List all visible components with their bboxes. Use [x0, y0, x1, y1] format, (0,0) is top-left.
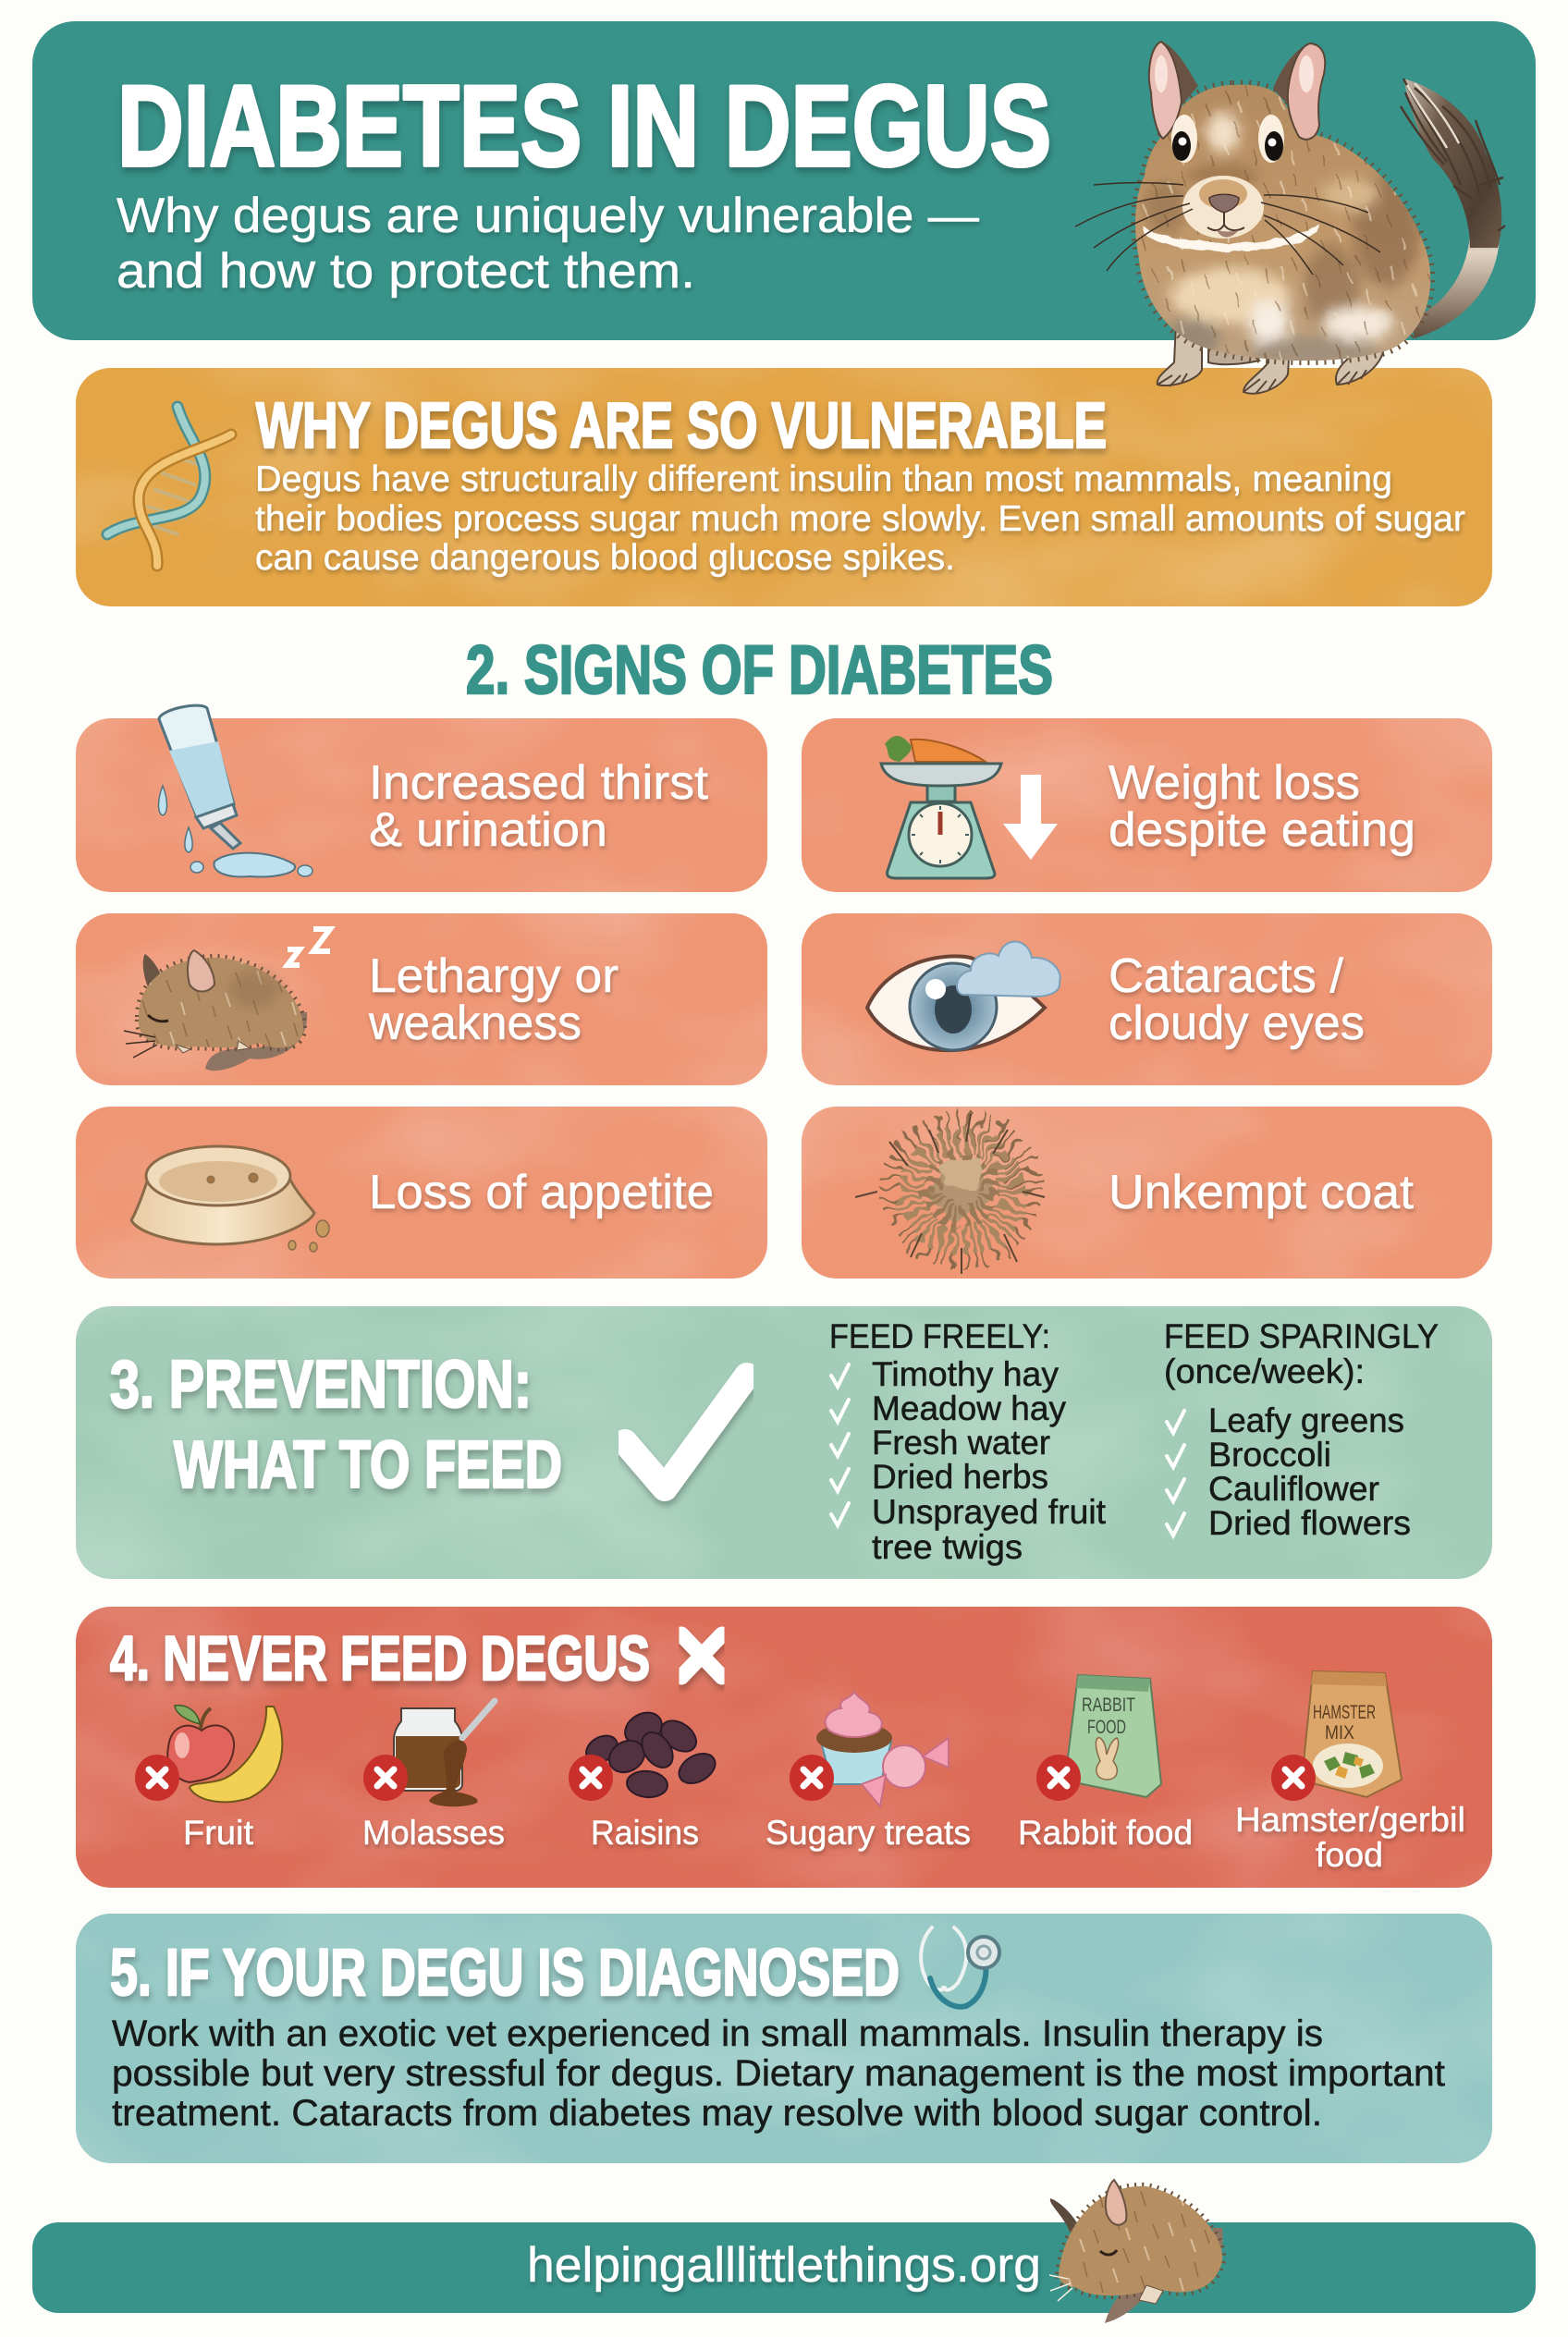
item: fruit: Fruit	[183, 1814, 254, 1852]
item: rabbit food: Rabbit food	[1018, 1814, 1193, 1852]
card label	[369, 756, 709, 857]
panel: why degus are so vulnerable	[76, 368, 1492, 606]
item: hamster mix	[1235, 1671, 1465, 1874]
item: raisins: Raisins	[591, 1814, 699, 1852]
degu face	[1171, 115, 1284, 238]
card: weight loss	[802, 718, 1492, 892]
icon: cloudy eye	[867, 941, 1060, 1050]
panel heading: WHY DEGUS ARE SO VULNERABLE	[256, 389, 1107, 461]
icon: tuft of fur	[855, 1114, 1045, 1274]
card label: & urination	[369, 803, 607, 857]
panel body text: their bodies process sugar much more slowly. Even small amounts of sugar	[255, 499, 1465, 539]
panel: never feed	[76, 1607, 1492, 1888]
icon: leaking water bottle	[159, 705, 312, 876]
degu legs and feet	[1158, 324, 1384, 394]
item: raisins	[569, 1707, 720, 1852]
list: feed freely: Meadow hay	[872, 1389, 1066, 1427]
illustration: standing degu	[1075, 42, 1505, 394]
subtitle	[116, 189, 979, 299]
panel heading: 5. IF YOUR DEGU IS DIAGNOSED	[110, 1937, 900, 2010]
card label: cloudy eyes	[1109, 997, 1365, 1050]
panel body text: can cause dangerous blood glucose spikes.	[255, 538, 955, 578]
panel body text	[255, 459, 1465, 578]
panel: prevention	[76, 1306, 1492, 1579]
card: increased thirst	[76, 705, 767, 892]
panel body text	[112, 2013, 1445, 2134]
item: rabbit food	[1018, 1675, 1193, 1852]
card label	[1109, 756, 1415, 857]
illustration: sleeping degu in footer	[1049, 2180, 1223, 2323]
item: hamster mix: Hamster/gerbil	[1235, 1801, 1465, 1839]
card label: Weight loss	[1109, 756, 1360, 810]
card label	[368, 949, 619, 1050]
list: feed freely: Fresh water	[872, 1424, 1050, 1462]
list: feed freely: FEED FREELY:	[829, 1317, 1050, 1355]
panel: if your degu is diagnosed	[76, 1914, 1492, 2163]
icon: stethoscope	[921, 1927, 999, 2007]
panel body text: Work with an exotic vet experienced in small mammals. Insulin therapy is	[112, 2013, 1323, 2054]
card: lethargy	[76, 913, 767, 1085]
item: rabbit food: FOOD	[1087, 1717, 1126, 1738]
icon: DNA helix	[107, 407, 231, 566]
card label: weakness	[368, 997, 582, 1050]
website link: helpingalllittlethings.org	[527, 2238, 1041, 2293]
item: hamster mix: HAMSTER	[1313, 1702, 1376, 1723]
panel body text: possible but very stressful for degus. Dietary management is the most important	[112, 2053, 1445, 2094]
card label: Lethargy or	[369, 949, 619, 1003]
footer bar	[32, 2222, 1536, 2313]
list: feed freely	[829, 1317, 1107, 1566]
list: feed sparingly: (once/week):	[1164, 1352, 1365, 1390]
item: fruit	[135, 1706, 282, 1852]
degu whiskers	[1075, 183, 1380, 275]
subtitle: Why degus are uniquely vulnerable —	[116, 189, 979, 243]
list: feed sparingly: Leafy greens	[1208, 1401, 1404, 1439]
icon: empty bowl	[131, 1146, 329, 1252]
panel heading: 4. NEVER FEED DEGUS	[110, 1623, 650, 1694]
icon: large check mark	[625, 1376, 747, 1488]
icon: kitchen scale with carrot	[881, 736, 1001, 878]
card label	[1109, 949, 1365, 1050]
card label: Loss of appetite	[369, 1166, 714, 1219]
title: DIABETES IN DEGUS	[117, 63, 1051, 190]
panel heading	[110, 1348, 562, 1502]
item: rabbit food: RABBIT	[1082, 1695, 1135, 1716]
card: loss of appetite	[76, 1107, 767, 1279]
section heading: signs of diabetes: 2. SIGNS OF DIABETES	[466, 631, 1053, 708]
list: feed sparingly: FEED SPARINGLY	[1164, 1317, 1439, 1355]
list: feed freely: tree twigs	[872, 1528, 1023, 1566]
check marks	[1167, 1411, 1184, 1536]
card label: Cataracts /	[1109, 949, 1344, 1003]
panel body text: treatment. Cataracts from diabetes may resolve with blood sugar control.	[112, 2093, 1322, 2134]
item: molasses: Molasses	[362, 1814, 505, 1852]
item: hamster mix: food	[1316, 1836, 1383, 1874]
icon: down arrow	[1003, 775, 1058, 860]
list: feed freely: Dried herbs	[872, 1458, 1048, 1496]
list: feed sparingly: Cauliflower	[1208, 1470, 1379, 1508]
list: feed sparingly: Broccoli	[1208, 1436, 1331, 1474]
card label: despite eating	[1109, 803, 1415, 857]
panel body text: Degus have structurally different insulin than most mammals, meaning	[255, 459, 1392, 499]
check marks	[831, 1364, 849, 1525]
icon: sleep zz	[288, 929, 330, 965]
list: feed sparingly: Dried flowers	[1208, 1504, 1411, 1542]
list: feed freely: Timothy hay	[872, 1355, 1060, 1393]
icon: white cross	[681, 1634, 722, 1677]
list: feed freely: Unsprayed fruit	[872, 1493, 1107, 1531]
icon: sleeping degu	[124, 950, 307, 1071]
hero banner	[32, 21, 1536, 340]
item: molasses	[362, 1701, 505, 1852]
subtitle: and how to protect them.	[116, 244, 695, 299]
degu ears	[1149, 42, 1325, 140]
list: feed sparingly	[1164, 1317, 1439, 1542]
panel heading: WHAT TO FEED	[174, 1428, 562, 1502]
degu body	[1119, 74, 1442, 370]
card: unkempt coat	[802, 1107, 1492, 1279]
card label: Increased thirst	[369, 756, 709, 810]
degu tail	[1401, 79, 1505, 338]
panel heading: 3. PREVENTION:	[110, 1348, 532, 1422]
item: sugary treats: Sugary treats	[766, 1814, 971, 1852]
item: sugary treats	[766, 1692, 971, 1852]
card label: Unkempt coat	[1109, 1166, 1415, 1219]
item: hamster mix: MIX	[1325, 1722, 1354, 1744]
card: cataracts	[802, 913, 1492, 1085]
